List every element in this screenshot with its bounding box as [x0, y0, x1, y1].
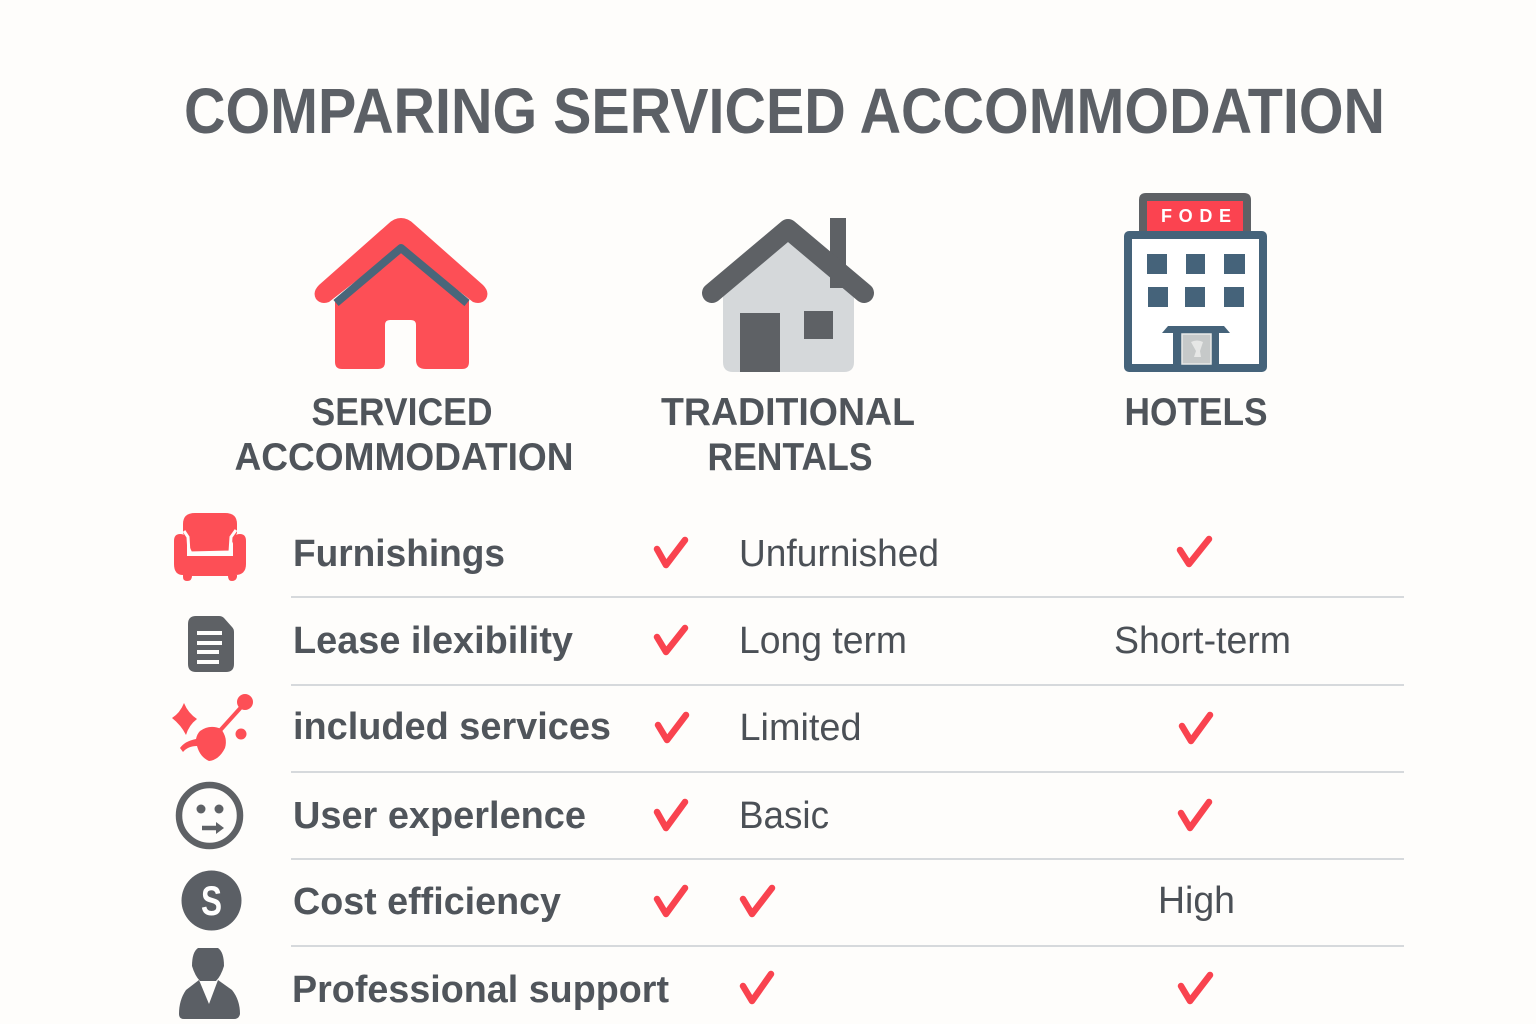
check: hotel services [1182, 715, 1210, 741]
icon: red house [315, 218, 487, 369]
heading: traditional rentals: RENTALS [708, 436, 872, 479]
check: hotel experience [1181, 802, 1209, 828]
label: user experience: User experlence [293, 795, 586, 837]
label: lease flexibility: Lease ilexibility [293, 620, 573, 662]
icon: hotel building: FODE [1161, 206, 1231, 226]
value: high: High [1158, 880, 1235, 922]
value: short-term: Short-term [1114, 620, 1291, 662]
label: professional support: Professional support [292, 969, 669, 1011]
check: serviced experience [657, 802, 685, 828]
check: serviced services [658, 715, 686, 740]
row: included services [172, 694, 1210, 761]
column: hotels [1124, 193, 1268, 434]
heading: serviced accommodation: SERVICED [312, 391, 492, 434]
value: limited: Limited [740, 707, 862, 749]
check: serviced furnishings [657, 540, 685, 565]
heading: serviced accommodation: ACCOMMODATION [234, 436, 574, 479]
row: professional support [179, 948, 1210, 1019]
icon: person [179, 948, 240, 1019]
icon: currency coin: S [201, 877, 222, 924]
value: long term: Long term [739, 620, 907, 662]
column: traditional rentals [661, 218, 915, 479]
icon: neutral face [179, 785, 240, 846]
check: hotel support [1181, 975, 1210, 1001]
label: cost efficiency: Cost efficiency [293, 881, 561, 923]
icon: hotel building [1128, 193, 1263, 368]
row: user experience [179, 785, 1209, 846]
icon: currency coin [182, 870, 242, 930]
value: basic: Basic [739, 795, 829, 837]
icon: document [188, 616, 234, 672]
title: COMPARING SERVICED ACCOMMODATION [184, 75, 1385, 147]
check: serviced lease [657, 628, 685, 652]
icon: armchair [174, 513, 246, 581]
value: unfurnished: Unfurnished [739, 533, 939, 575]
row: cost efficiency [182, 870, 1235, 930]
check: serviced cost [657, 888, 685, 914]
row: furnishings [174, 513, 1209, 581]
check: traditional cost [743, 888, 772, 914]
heading: hotels: HOTELS [1124, 391, 1268, 434]
icon: services [172, 694, 253, 761]
icon: grey house [712, 218, 864, 372]
row: lease flexibility [188, 616, 1291, 672]
heading: traditional rentals: TRADITIONAL [661, 391, 915, 434]
column: serviced accommodation [234, 218, 574, 479]
label: furnishings: Furnishings [293, 533, 505, 575]
check: traditional support [743, 974, 771, 1001]
check: hotel furnishings [1180, 539, 1209, 564]
label: included services: included services [293, 706, 611, 748]
